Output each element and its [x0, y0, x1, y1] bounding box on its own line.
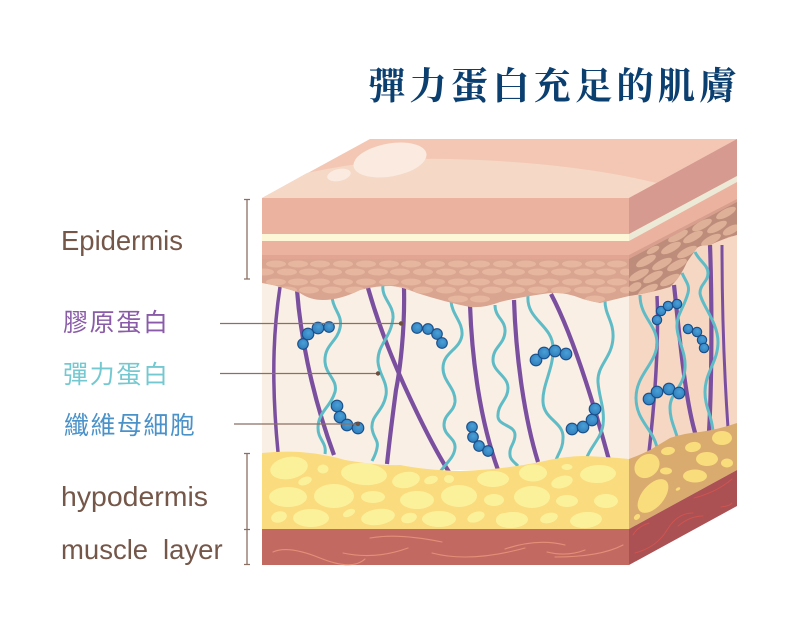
chain 9 — [643, 383, 685, 405]
chain 4 — [467, 422, 493, 456]
title: 彈力蛋白充足的肌膚 — [368, 66, 741, 108]
label: muscle layer: muscle — [61, 534, 148, 565]
muscle layer front — [262, 529, 629, 565]
fibroblast cells — [298, 299, 709, 456]
dermis background — [262, 199, 737, 470]
chain 5 — [530, 345, 572, 366]
epidermis front layers — [262, 198, 629, 260]
leader line: elastin — [220, 371, 380, 376]
elastin fibres — [318, 252, 718, 472]
chain 8 — [683, 324, 709, 353]
skin block — [254, 137, 741, 565]
bracket: epidermis — [244, 200, 250, 279]
label: elastin: 彈力蛋白 — [63, 361, 168, 389]
leader line: fibroblast — [234, 422, 360, 426]
fat layer side — [629, 423, 737, 529]
fat layer front — [262, 452, 629, 529]
top surface — [262, 137, 737, 198]
epidermis side layers — [629, 139, 737, 260]
bracket: hypodermis and muscle — [244, 454, 250, 564]
label: Epidermis: Epidermis — [61, 225, 183, 256]
chain 7 — [652, 299, 682, 325]
label: collagen: 膠原蛋白 — [63, 309, 168, 337]
chain 1 — [298, 322, 334, 349]
leader line: collagen — [220, 321, 403, 326]
muscle layer side — [629, 470, 737, 565]
cell layer side — [629, 202, 737, 296]
label: hypodermis: hypodermis — [61, 481, 208, 512]
cell layer front — [262, 259, 629, 308]
chain 6 — [566, 403, 601, 435]
chain 2 — [412, 323, 447, 348]
label: fibroblast: 纖維母細胞 — [64, 412, 195, 440]
chain 3 — [331, 400, 364, 434]
collagen fibres — [274, 245, 728, 472]
label: muscle layer: layer — [163, 534, 223, 565]
